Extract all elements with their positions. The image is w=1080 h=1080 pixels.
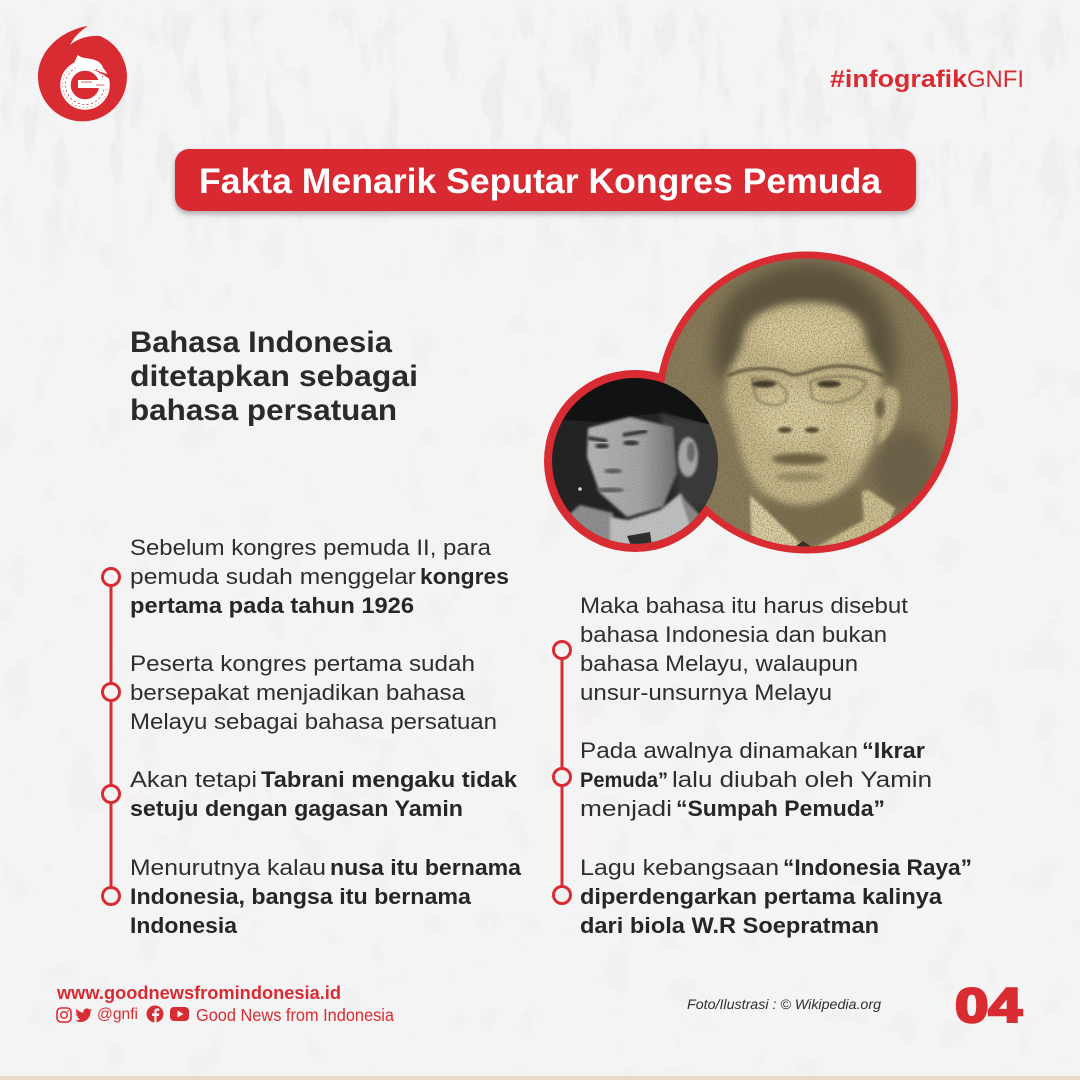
footer: website and social xyxy=(56,982,394,1025)
hashtag: #infografik xyxy=(830,66,968,93)
text block: left point 1 xyxy=(130,535,509,618)
text block: left point 4 xyxy=(130,855,522,938)
footer: website and social: www.goodnewsfromindonesia.id xyxy=(56,982,341,1003)
portrait: Tabrani (small) xyxy=(552,378,718,544)
text block: left point 1: pertama pada tahun 1926 xyxy=(130,593,414,618)
text block: right point 3 xyxy=(580,855,972,938)
text block: right point 1: Maka bahasa itu harus disebut xyxy=(580,593,908,618)
timeline: right xyxy=(554,642,570,904)
portrait: Mohammad Yamin (large) xyxy=(650,250,970,560)
text block: right point 1: bahasa Melayu, walaupun xyxy=(580,651,858,676)
heading: Bahasa Indonesia xyxy=(130,326,392,359)
text block: right point 2: “Sumpah Pemuda” xyxy=(676,796,885,821)
text block: right point 3: “Indonesia Raya” xyxy=(783,855,972,880)
text block: left point 4: Menurutnya kalau xyxy=(130,855,326,880)
text block: right point 2: menjadi xyxy=(580,796,672,821)
heading xyxy=(130,326,418,427)
text block: left point 2: Melayu sebagai bahasa persatuan xyxy=(130,709,497,734)
text block: left point 2: bersepakat menjadikan bahasa xyxy=(130,680,466,705)
timeline: left xyxy=(102,568,120,904)
text block: right point 2 xyxy=(580,738,932,821)
text block: left point 3: Tabrani mengaku tidak xyxy=(261,767,518,792)
photo credit: Foto/Ilustrasi : © Wikipedia.org xyxy=(687,997,882,1012)
title banner xyxy=(175,149,916,211)
page number: 04 xyxy=(955,980,1022,1033)
text block: right point 1: bahasa Indonesia dan bukan xyxy=(580,622,887,647)
text block: left point 3: setuju dengan gagasan Yamin xyxy=(130,796,463,821)
text block: right point 1: unsur-unsurnya Melayu xyxy=(580,680,832,705)
text block: left point 4: Indonesia, bangsa itu bernama xyxy=(130,884,472,909)
text block: right point 2: Pada awalnya dinamakan xyxy=(580,738,858,763)
text block: right point 3: dari biola W.R Soepratman xyxy=(580,913,879,938)
text block: left point 1: Sebelum kongres pemuda II, para xyxy=(130,535,492,560)
text block: left point 1: pemuda sudah menggelar xyxy=(130,564,416,589)
text block: right point 2: Pemuda” xyxy=(580,769,668,792)
text block: left point 1: kongres xyxy=(420,564,509,589)
hashtag xyxy=(830,66,1024,93)
title banner: Fakta Menarik Seputar Kongres Pemuda xyxy=(199,162,882,201)
text block: left point 3: Akan tetapi xyxy=(130,767,257,792)
text block: left point 3 xyxy=(130,767,518,821)
text block: left point 2: Peserta kongres pertama sudah xyxy=(130,651,475,676)
text block: right point 1 xyxy=(580,593,908,705)
text block: left point 2 xyxy=(130,651,497,734)
logo: GNFI xyxy=(38,26,127,121)
text block: right point 2: lalu diubah oleh Yamin xyxy=(672,767,932,792)
hashtag: GNFI xyxy=(967,66,1024,93)
heading: bahasa persatuan xyxy=(130,394,397,427)
footer: website and social: @gnfi xyxy=(97,1006,138,1023)
text block: left point 4: nusa itu bernama xyxy=(330,855,522,880)
background texture xyxy=(0,1076,1080,1080)
text block: right point 3: diperdengarkan pertama kalinya xyxy=(580,884,943,909)
portrait: small photo ring xyxy=(544,370,726,552)
footer: website and social: Good News from Indonesia xyxy=(196,1005,394,1025)
text block: right point 3: Lagu kebangsaan xyxy=(580,855,779,880)
text block: left point 4: Indonesia xyxy=(130,913,238,938)
text block: right point 2: “Ikrar xyxy=(862,738,925,763)
heading: ditetapkan sebagai xyxy=(130,360,418,393)
